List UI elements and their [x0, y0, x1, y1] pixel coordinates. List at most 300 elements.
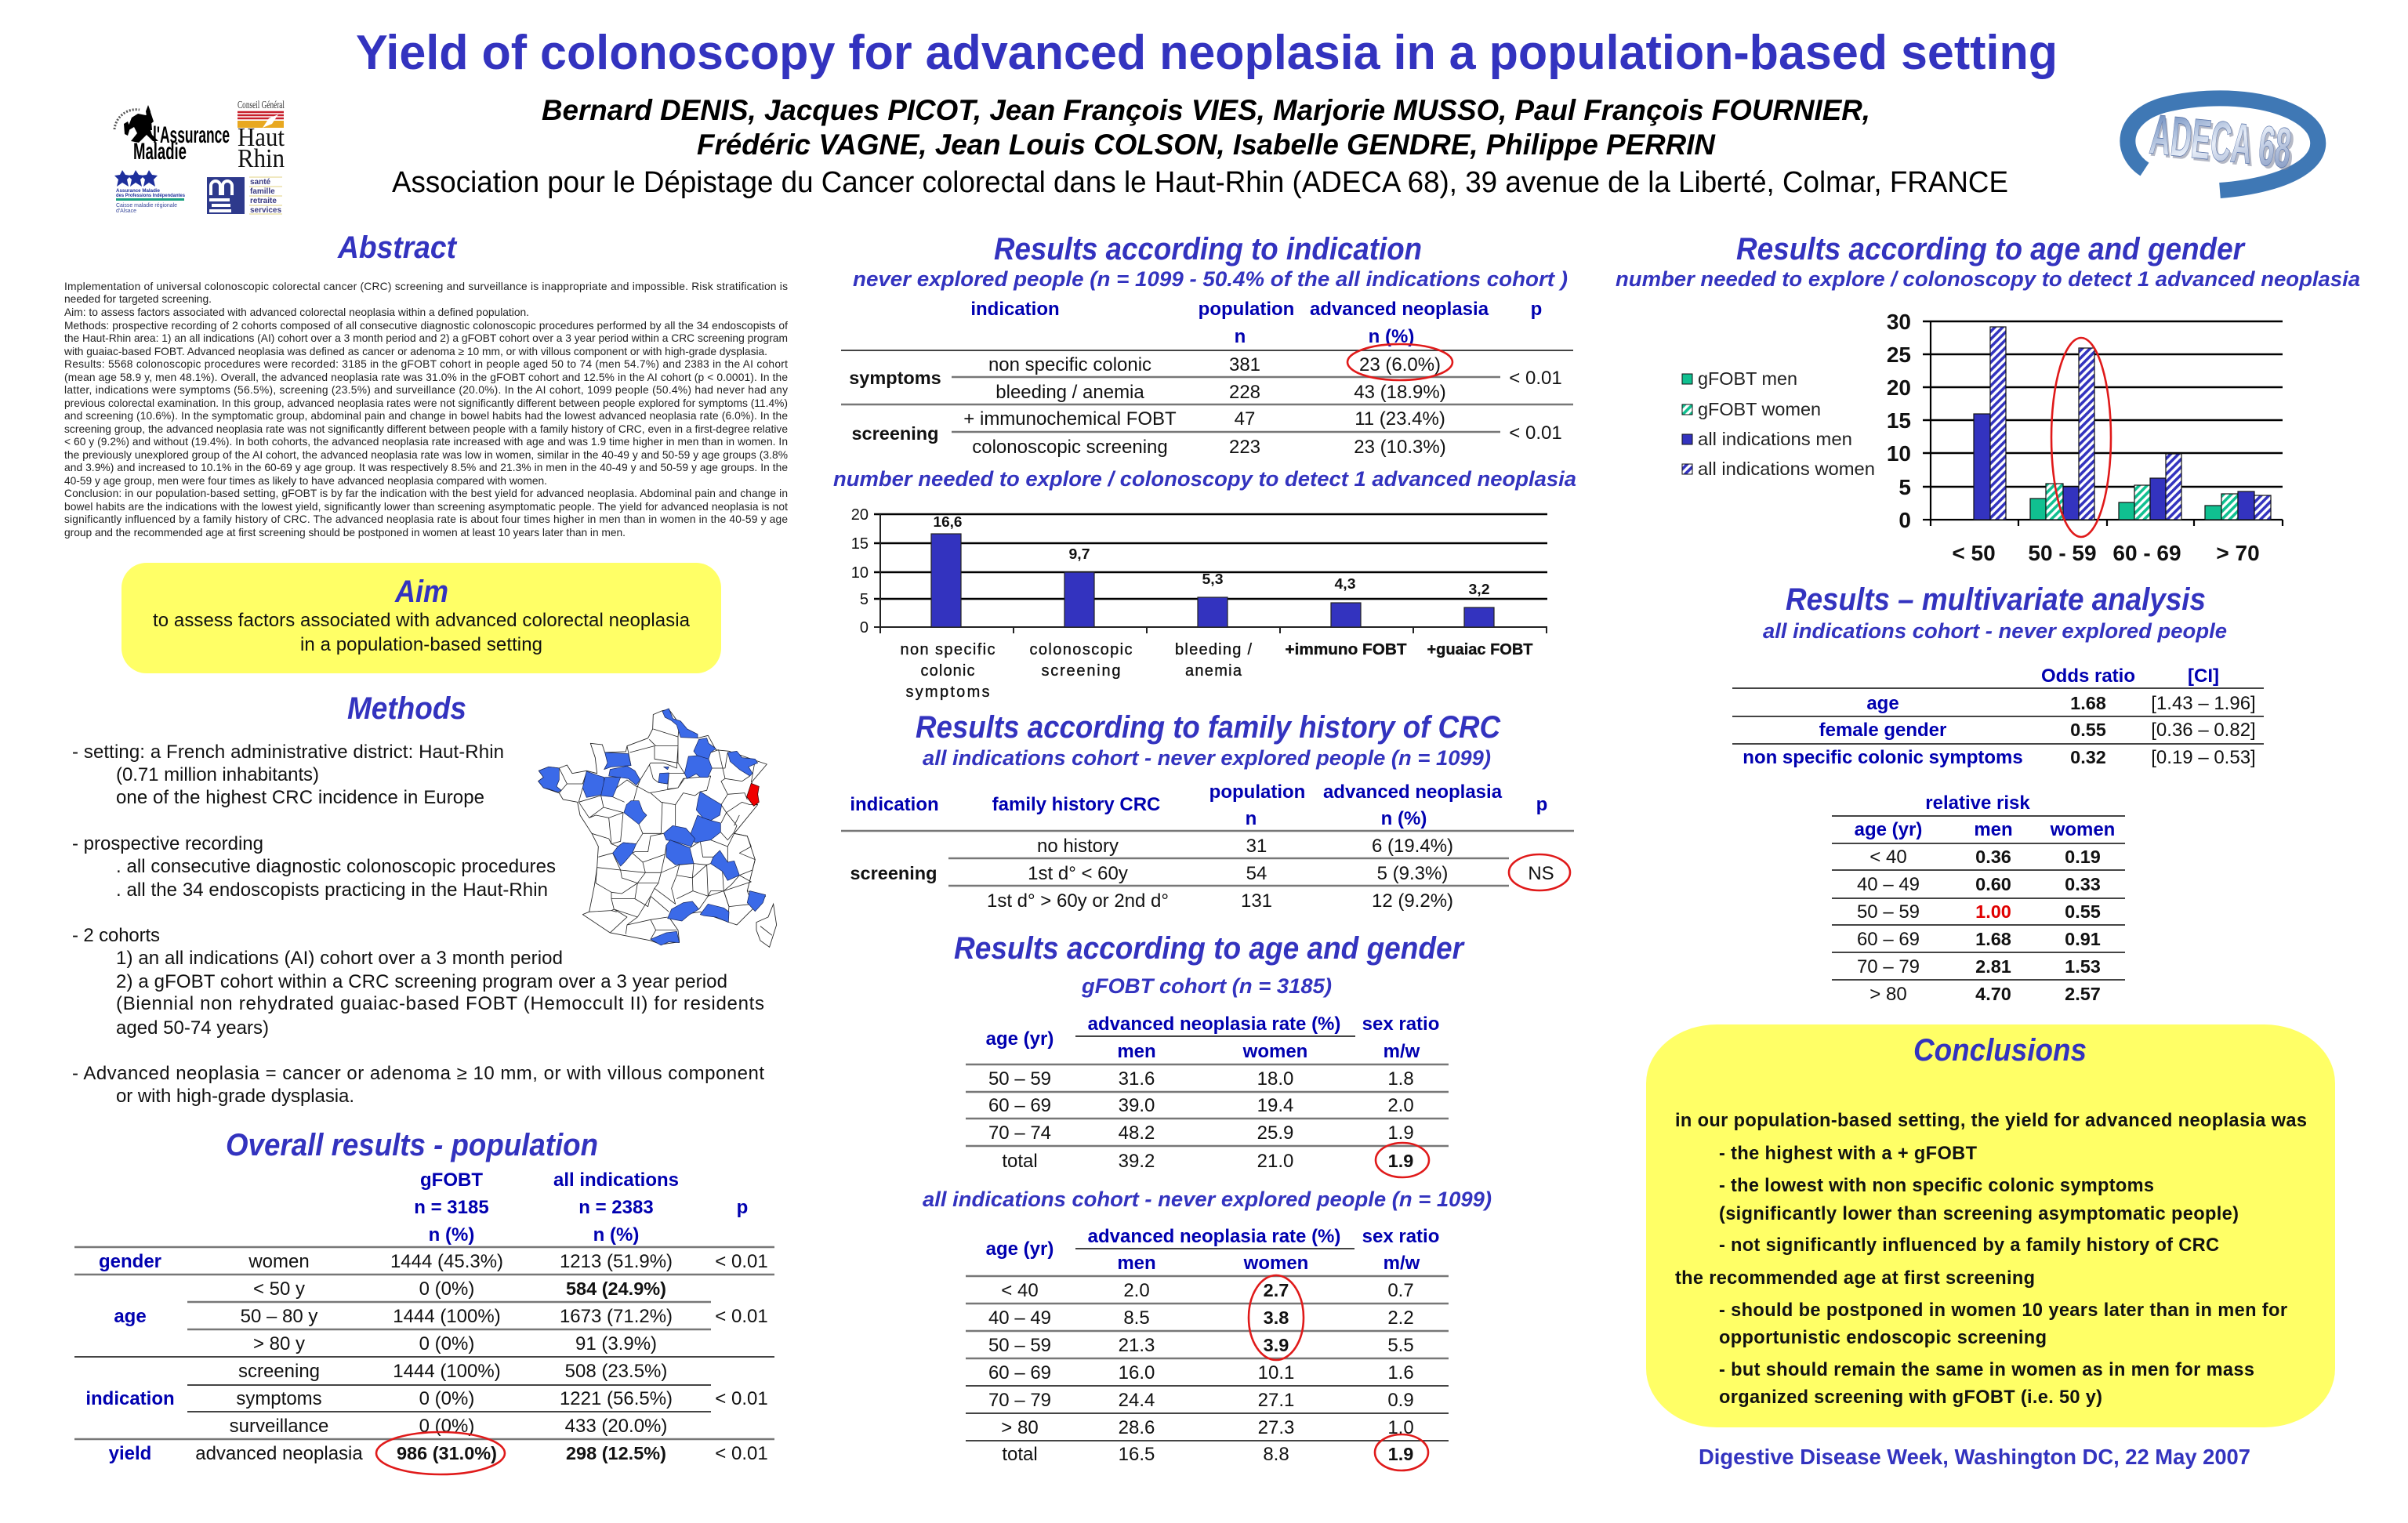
- table: overall results: < 0.01: [715, 1443, 768, 1464]
- bars: [931, 534, 1494, 627]
- table: relative risk: women: [2050, 819, 2115, 840]
- text: conclusions list: - but should remain the same in women as in men for mass: [1719, 1360, 2254, 1380]
- heading: Results according to age and gender (right): Results according to age and gender: [1736, 232, 2246, 267]
- table: all indications cohort by age: < 40: [1001, 1280, 1039, 1301]
- table: overall results: 0 (0%): [419, 1416, 474, 1437]
- value labels: 9,7: [1069, 546, 1090, 562]
- logo: Conseil General Haut-Rhin: Rhin: [238, 144, 285, 173]
- table: relative risk: age (yr): [1855, 819, 1922, 840]
- table: odds ratios: [0.36 – 0.82]: [2151, 720, 2256, 741]
- text block: abstract: screening group, the advanced neoplasia rate was not significantly different between people with a family history of CRC, even in a first-degree relative: [64, 423, 788, 435]
- text block: abstract: significantly influenced by a family history of CRC. The advanced neoplasia rate is about four times higher in men than in women in the 40-59 y age: [64, 513, 788, 525]
- value labels: 4,3: [1334, 576, 1356, 592]
- table: overall results: 1444 (100%): [393, 1306, 501, 1327]
- table: relative risk: relative risk: [1925, 792, 2030, 814]
- table: relative risk: 0.60: [1975, 874, 2011, 894]
- heading: Conclusions: Conclusions: [1913, 1033, 2087, 1068]
- text block: methods: . all the 34 endoscopists practicing in the Haut-Rhin: [116, 879, 548, 901]
- table: results by indication: population: [1199, 299, 1294, 320]
- x axis labels: > 70: [2216, 541, 2260, 565]
- table: gFOBT cohort by age: 1.9: [1387, 1122, 1414, 1144]
- text block: methods: one of the highest CRC incidence in Europe: [116, 787, 484, 808]
- table: odds ratios: female gender: [1819, 720, 1946, 741]
- y axis labels: 20: [1887, 375, 1911, 400]
- table: family history: 1st d° < 60y: [1028, 863, 1128, 884]
- table: overall results: age: [114, 1306, 147, 1327]
- table: family history: no history: [1037, 836, 1119, 857]
- table: all indications cohort by age: 3.9: [1264, 1335, 1289, 1355]
- table: overall results: advanced neoplasia: [195, 1443, 363, 1464]
- x axis labels: < 50: [1952, 541, 1996, 565]
- table: relative risk: 0.33: [2065, 874, 2101, 894]
- table: overall results: 1673 (71.2%): [560, 1306, 673, 1327]
- table: gFOBT cohort by age: 21.0: [1257, 1151, 1293, 1172]
- logo: Assurance Maladie: l'Assurance: [153, 122, 230, 148]
- logo: Assurance Maladie: [114, 105, 230, 165]
- table: overall results: p: [737, 1197, 748, 1218]
- table: results by indication: n (%): [1369, 326, 1414, 347]
- table: results by indication: indication: [970, 299, 1060, 320]
- table: all indications cohort by age: 28.6: [1119, 1417, 1155, 1438]
- table: overall results: n (%): [429, 1224, 474, 1246]
- table: gFOBT cohort by age: 60 – 69: [988, 1095, 1051, 1116]
- table: all indications cohort by age: 0.9: [1387, 1390, 1414, 1411]
- text block: methods: or with high-grade dysplasia.: [116, 1086, 354, 1107]
- table: odds ratios: age: [1866, 693, 1899, 714]
- table: gFOBT cohort by age: sex ratio: [1362, 1014, 1439, 1035]
- table: gFOBT cohort by age: 19.4: [1257, 1095, 1293, 1116]
- y axis labels: [1887, 310, 1911, 532]
- text block: abstract: Methods: prospective recording of 2 cohorts composed of all consecutive diagnostic colonoscopic procedures performed by all the 34 endoscopists of: [64, 320, 788, 332]
- category labels: symptoms: [906, 684, 989, 701]
- category labels: [900, 641, 1533, 701]
- table: family history: indication: [850, 794, 939, 815]
- category labels: +guaiac FOBT: [1427, 641, 1533, 658]
- callout: NS circled: [1509, 854, 1570, 890]
- table: all indications cohort by age: age (yr): [986, 1238, 1054, 1260]
- table: all indications cohort by age: men: [1117, 1253, 1156, 1274]
- table: results by indication: 47: [1235, 408, 1255, 430]
- table: overall results: 508 (23.5%): [565, 1361, 667, 1382]
- text block: abstract: Results: 5568 colonoscopic procedures were recorded: 3185 in the gFOBT cohort in people aged 50 to 74 (men 54.7%) and 2383 in the AI cohort: [64, 358, 788, 370]
- text: conclusions list: - should be postponed in women 10 years later than in men for: [1719, 1300, 2287, 1321]
- heading: Methods: Methods: [347, 691, 466, 726]
- table: all indications cohort by age: 70 – 79: [988, 1390, 1051, 1411]
- text block: abstract: needed for targeted screening.: [64, 293, 212, 305]
- table: family history: 31: [1246, 836, 1267, 857]
- subheading: never explored people: never explored people (n = 1099 - 50.4% of the all indications cohort ): [853, 267, 1568, 291]
- bars: under 50: [1974, 327, 2006, 520]
- table: results by indication: advanced neoplasia: [1310, 299, 1489, 320]
- y axis labels: 10: [851, 564, 869, 582]
- table: all indications cohort by age: 1.0: [1387, 1417, 1414, 1438]
- table: all indications cohort by age: women: [1243, 1253, 1308, 1274]
- table: odds ratios: [1.43 – 1.96]: [2151, 693, 2256, 714]
- value labels: 16,6: [933, 514, 963, 530]
- bars: 60-69: [2119, 454, 2181, 520]
- table: results by indication: 11 (23.4%): [1354, 408, 1445, 430]
- legend: gFOBT women: [1698, 399, 1821, 419]
- heading: Results according to indication: Results according to indication: [994, 232, 1422, 267]
- text block: methods: 1) an all indications (AI) cohort over a 3 month period: [116, 948, 563, 969]
- text: conclusions list: in our population-based setting, the yield for advanced neoplasia was: [1675, 1111, 2307, 1131]
- table: overall results: 1444 (45.3%): [390, 1251, 503, 1272]
- table: all indications cohort by age: 2.7: [1264, 1280, 1289, 1300]
- x axis labels: [1952, 541, 2260, 565]
- table: gFOBT cohort by age: 31.6: [1119, 1068, 1155, 1090]
- table: overall results: surveillance: [230, 1416, 328, 1437]
- table: odds ratios: 0.32: [2070, 747, 2106, 767]
- text block: methods: - Advanced neoplasia = cancer or adenoma ≥ 10 mm, or with villous component: [72, 1063, 764, 1084]
- text: conclusions list: - the highest with a + gFOBT: [1719, 1144, 1978, 1164]
- table: gFOBT cohort by age: 39.0: [1119, 1095, 1155, 1116]
- table: family history: p: [1536, 794, 1547, 815]
- heading: multivariate analysis: Results – multivariate analysis: [1786, 582, 2206, 617]
- table: gFOBT cohort by age: advanced neoplasia rate (%): [1088, 1014, 1340, 1035]
- table: overall results: gender: [99, 1251, 161, 1272]
- text block: abstract: and 3.9%) and increased to 10.1% in the 60-69 y age group. It was respectively 8.5% and 21.3% in men in the 40-49 y and 50-59 y age groups. In the: [64, 462, 788, 473]
- text block: abstract: Conclusion: in our population-based setting, gFOBT is by far the indication with the best yield for advanced neoplasia. Abdominal pain and change in: [64, 488, 788, 499]
- table: all indications cohort by age: 27.1: [1258, 1390, 1294, 1411]
- table: family history: [841, 781, 1574, 912]
- table: relative risk: > 80: [1869, 984, 1907, 1005]
- table: odds ratios: 1.68: [2070, 693, 2106, 713]
- table: relative risk: 2.57: [2065, 984, 2101, 1004]
- y axis labels: 15: [1887, 408, 1911, 433]
- subheading: multivariate cohort: all indications cohort - never explored people: [1763, 619, 2227, 643]
- table: overall results: < 50 y: [253, 1278, 305, 1300]
- highlighted departments: [539, 709, 766, 945]
- table: results by indication: screening: [851, 423, 939, 444]
- table: overall results: 986 (31.0%): [397, 1443, 497, 1463]
- value labels: 5,3: [1202, 571, 1223, 587]
- table: overall results: 91 (3.9%): [575, 1333, 657, 1354]
- authors: Bernard DENIS, Jacques PICOT, Jean François VIES, Marjorie MUSSO, Paul François FOURNIER,: [542, 94, 1870, 126]
- subheading: number needed to explore: number needed to explore / colonoscopy to detect 1 advanced neoplasia: [833, 467, 1576, 491]
- table: all indications cohort by age: advanced neoplasia rate (%): [1088, 1226, 1340, 1247]
- x axis labels: 50 - 59: [2028, 541, 2097, 565]
- category labels: bleeding /: [1175, 641, 1252, 658]
- table: relative risk: 4.70: [1975, 984, 2011, 1004]
- table: family history: 1st d° > 60y or 2nd d°: [987, 890, 1169, 912]
- table: overall results: n = 3185: [414, 1197, 489, 1218]
- table: relative risk: 0.19: [2065, 847, 2101, 867]
- table: overall results: symptoms: [236, 1388, 322, 1409]
- department borders: [559, 723, 758, 939]
- y axis labels: 5: [1898, 475, 1911, 499]
- table: overall results: 584 (24.9%): [566, 1278, 666, 1299]
- text: conclusions list: - the lowest with non specific colonic symptoms: [1719, 1176, 2154, 1196]
- subheading: family history cohort: all indications cohort - never explored people (n = 1099): [923, 746, 1491, 770]
- table: all indications cohort by age: 0.7: [1387, 1280, 1414, 1301]
- text: aim statement: [153, 610, 691, 655]
- category labels: colonoscopic: [1030, 641, 1132, 658]
- table: results by indication: + immunochemical FOBT: [963, 408, 1177, 430]
- table: overall results: 1221 (56.5%): [560, 1388, 673, 1409]
- table: results by indication: non specific colonic: [988, 354, 1151, 375]
- title: Yield of colonoscopy for advanced neoplasia in a population-based setting: [356, 26, 2058, 80]
- logo: MSA: [207, 177, 282, 215]
- table: family history: 131: [1241, 890, 1272, 912]
- table: all indications cohort by age: 60 – 69: [988, 1362, 1051, 1383]
- logo: AMPI Alsace: Caisse maladie régionale: [116, 203, 177, 209]
- y axis labels: 10: [1887, 441, 1911, 466]
- table: results by indication: n: [1235, 326, 1246, 347]
- logo: AMPI Alsace: Assurance Maladie: [116, 189, 161, 194]
- text: conclusions list: the recommended age at first screening: [1675, 1268, 2035, 1289]
- y axis labels: 5: [860, 591, 869, 608]
- heading: Overall results: Overall results - population: [226, 1128, 598, 1162]
- callout: 986 circled: [376, 1432, 505, 1474]
- text block: abstract: previous colorectal examination. In this group, advanced neoplasia rates were not significantly different between people explored for symptoms (11.4%): [64, 397, 788, 409]
- text block: methods: . all consecutive diagnostic colonoscopic procedures: [116, 856, 556, 877]
- category labels: anemia: [1185, 662, 1242, 680]
- table: relative risk: 0.36: [1975, 847, 2011, 867]
- text block: abstract: the previously unexplored group of the AI cohort, the advanced neoplasia rate was low in women, similar in the 40-49 y and 50-59 y age groups (3.8%: [64, 449, 788, 461]
- text block: abstract: Implementation of universal colonoscopic colorectal cancer (CRC) screening and surveillance is inappropriate and impossible. Risk stratification is: [64, 281, 788, 292]
- table: relative risk: 0.91: [2065, 929, 2101, 949]
- table: results by indication: bleeding / anemia: [995, 382, 1144, 403]
- panel: aim: [121, 563, 721, 673]
- table: relative risk: 2.81: [1975, 956, 2011, 977]
- table: gFOBT cohort by age: 1.8: [1387, 1068, 1414, 1090]
- text: aim statement: to assess factors associated with advanced colorectal neoplasia: [153, 610, 691, 631]
- table: overall results: 0 (0%): [419, 1333, 474, 1354]
- table: all indications cohort by age: [966, 1226, 1449, 1465]
- table: overall results: gFOBT: [420, 1169, 483, 1191]
- subheading: number needed by age: number needed to explore / colonoscopy to detect 1 advanced neoplasia: [1616, 267, 2360, 291]
- category labels: colonic: [920, 662, 975, 680]
- table: gFOBT cohort by age: women: [1242, 1041, 1307, 1062]
- table: family history: n: [1246, 808, 1257, 829]
- text block: abstract: latter, indications were symptoms (56.5%), screening (23.5%) and surveillance (20.0%). In the AI cohort, 1099 people (50.4%) had never had any: [64, 384, 788, 396]
- table: relative risk: men: [1974, 819, 2013, 840]
- text block: methods: - setting: a French administrative district: Haut-Rhin: [72, 742, 504, 763]
- table: overall results: [74, 1169, 774, 1464]
- text block: methods: 2) a gFOBT cohort within a CRC screening program over a 3 year period: [116, 971, 727, 992]
- table: all indications cohort by age: 16.0: [1119, 1362, 1155, 1383]
- table: overall results: 50 – 80 y: [241, 1306, 317, 1327]
- legend: [1682, 368, 1875, 479]
- table: results by indication: p: [1531, 299, 1542, 320]
- table: results by indication: < 0.01: [1509, 422, 1562, 444]
- table: overall results: n (%): [593, 1224, 639, 1246]
- table: all indications cohort by age: 10.1: [1258, 1362, 1294, 1383]
- text block: methods: (0.71 million inhabitants): [116, 764, 319, 785]
- y axis labels: 15: [851, 535, 869, 553]
- table: all indications cohort by age: 8.8: [1263, 1444, 1289, 1465]
- text block: methods: - prospective recording: [72, 833, 263, 854]
- footer: meeting: Digestive Disease Week, Washington DC, 22 May 2007: [1699, 1445, 2250, 1469]
- text block: methods: (Biennial non rehydrated guaiac-based FOBT (Hemoccult II) for residents: [116, 993, 764, 1014]
- text: aim statement: in a population-based setting: [300, 634, 542, 655]
- table: all indications cohort by age: 2.0: [1123, 1280, 1150, 1301]
- logo: MSA: services: [250, 206, 281, 215]
- table: all indications cohort by age: 50 – 59: [988, 1335, 1051, 1356]
- table: overall results: yield: [109, 1443, 151, 1464]
- callout: women 40-59 circled: [1249, 1275, 1304, 1360]
- legend: all indications women: [1698, 459, 1875, 479]
- table: family history: 12 (9.2%): [1372, 890, 1453, 912]
- subheading: all indications cohort: all indications cohort - never explored people (n = 1099): [923, 1188, 1492, 1211]
- text block: methods: - 2 cohorts: [72, 925, 160, 946]
- text block: abstract: with guaiac-based FOBT. Advanced neoplasia was defined as cancer or adenoma ≥ 10 mm, or with villous component or with high-grade dysplasia.: [63, 346, 767, 357]
- table: gFOBT cohort by age: 2.0: [1387, 1095, 1414, 1116]
- y axis labels: [851, 506, 869, 636]
- table: gFOBT cohort by age: [966, 1014, 1449, 1172]
- logo: AMPI Alsace: des Professions Indépendantes: [116, 194, 186, 198]
- table: relative risk: 1.68: [1975, 929, 2011, 949]
- heading: Aim: Aim: [394, 575, 448, 609]
- table: results by indication: 223: [1229, 437, 1260, 458]
- callout: all indications sex ratio circled: [1375, 1434, 1428, 1470]
- table: family history: population: [1209, 781, 1305, 803]
- table: family history: screening: [850, 863, 937, 883]
- category labels: +immuno FOBT: [1286, 641, 1406, 658]
- logos: partner institutions: [114, 100, 285, 215]
- table: all indications cohort by age: total: [1002, 1444, 1038, 1465]
- table: all indications cohort by age: 16.5: [1119, 1444, 1155, 1465]
- heading: Results according to age and gender (center): Results according to age and gender: [954, 931, 1465, 966]
- logo: MSA: santé: [250, 178, 271, 187]
- map: France departments: [539, 709, 777, 947]
- table: all indications cohort by age: 8.5: [1123, 1307, 1150, 1329]
- logo: AMPI Alsace: [114, 170, 186, 214]
- text block: abstract: (mean age 58.9 y, men 48.1%). Overall, the advanced neoplasia rate was 31.0% in the gFOBT cohort and 12.5% in the AI cohort (p < 0.0001). In the: [64, 372, 788, 383]
- bar chart: number needed to explore by indication: [851, 506, 1547, 701]
- table: overall results: 298 (12.5%): [566, 1443, 666, 1463]
- table: relative risk: [1832, 792, 2125, 1005]
- heading: Results according to family history: Results according to family history of CRC: [916, 710, 1501, 745]
- table: odds ratios: 0.55: [2070, 720, 2106, 740]
- y axis labels: 30: [1887, 310, 1911, 334]
- callout: 50-59 group circled: [2051, 338, 2111, 537]
- table: odds ratios: Odds ratio: [2041, 665, 2135, 687]
- table: overall results: all indications: [553, 1169, 679, 1191]
- legend: all indications men: [1698, 429, 1852, 449]
- table: all indications cohort by age: 24.4: [1119, 1390, 1155, 1411]
- table: overall results: screening: [238, 1361, 320, 1382]
- value labels: 3,2: [1469, 582, 1489, 597]
- authors: [542, 94, 1870, 161]
- table: all indications cohort by age: 2.2: [1387, 1307, 1414, 1329]
- category labels: screening: [1041, 662, 1121, 680]
- text: conclusions list: (significantly lower than screening asymptomatic people): [1719, 1204, 2239, 1224]
- table: results by indication: [841, 299, 1573, 458]
- logo: MSA: retraite: [250, 197, 277, 205]
- table: gFOBT cohort by age: age (yr): [986, 1028, 1054, 1050]
- y axis labels: 0: [860, 619, 869, 636]
- text block: abstract: the Haut-Rhin area: 1) an all indications (AI) cohort over a 3 month period and 2) a gFOBT cohort over a 3 year period within a CRC screening program: [64, 332, 788, 344]
- table: results by indication: symptoms: [849, 368, 941, 388]
- table: odds ratios: [CI]: [2188, 665, 2219, 687]
- callout: gFOBT sex ratio circled: [1376, 1143, 1429, 1177]
- table: all indications cohort by age: 27.3: [1258, 1417, 1294, 1438]
- table: gFOBT cohort by age: m/w: [1384, 1041, 1420, 1062]
- legend: gFOBT men: [1698, 368, 1797, 389]
- table: gFOBT cohort by age: 1.9: [1388, 1151, 1413, 1171]
- logo: AMPI Alsace: d'Alsace: [116, 209, 136, 214]
- table: relative risk: 70 – 79: [1857, 956, 1920, 977]
- table: family history: NS: [1528, 863, 1554, 884]
- table: gFOBT cohort by age: 50 – 59: [988, 1068, 1051, 1090]
- y axis labels: 25: [1887, 343, 1911, 367]
- table: results by indication: 23 (6.0%): [1359, 354, 1441, 375]
- table: overall results: 0 (0%): [419, 1278, 474, 1300]
- affiliation: Association pour le Dépistage du Cancer colorectal dans le Haut-Rhin (ADECA 68), 39 avenue de la Liberté, Colmar, FRANCE: [392, 166, 2008, 199]
- table: odds ratios: [1732, 665, 2264, 768]
- y axis labels: 20: [851, 506, 869, 524]
- table: all indications cohort by age: 5.5: [1387, 1335, 1414, 1356]
- subheading: gFOBT cohort: gFOBT cohort (n = 3185): [1081, 974, 1332, 998]
- table: odds ratios: [0.19 – 0.53]: [2151, 747, 2256, 768]
- bars: over 70: [2205, 491, 2271, 520]
- table: results by indication: 23 (10.3%): [1354, 437, 1446, 458]
- table: family history: advanced neoplasia: [1323, 781, 1503, 803]
- table: all indications cohort by age: 1.6: [1387, 1362, 1414, 1383]
- bars: 50-59: [2030, 348, 2094, 520]
- logo: ADECA 68: [2127, 98, 2318, 190]
- logo: Conseil General Haut-Rhin: Haut: [238, 123, 285, 152]
- table: overall results: 1213 (51.9%): [560, 1251, 673, 1272]
- x axis labels: 60 - 69: [2112, 541, 2181, 565]
- table: all indications cohort by age: 40 – 49: [988, 1307, 1051, 1329]
- table: results by indication: colonoscopic screening: [972, 437, 1168, 458]
- text: conclusions list: [1675, 1111, 2307, 1408]
- table: odds ratios: non specific colonic symptoms: [1743, 747, 2023, 768]
- table: all indications cohort by age: 1.9: [1388, 1444, 1413, 1464]
- value labels: [933, 514, 1489, 597]
- table: overall results: 433 (20.0%): [565, 1416, 667, 1437]
- authors: Frédéric VAGNE, Jean Louis COLSON, Isabelle GENDRE, Philippe PERRIN: [697, 129, 1716, 161]
- table: family history: n (%): [1381, 808, 1427, 829]
- table: family history: 5 (9.3%): [1377, 863, 1448, 884]
- table: overall results: 1444 (100%): [393, 1361, 501, 1382]
- table: all indications cohort by age: 21.3: [1119, 1335, 1155, 1356]
- table: relative risk: 1.53: [2065, 956, 2101, 977]
- text: conclusions list: - not significantly influenced by a family history of CRC: [1719, 1235, 2219, 1256]
- table: overall results: n = 2383: [578, 1197, 654, 1218]
- table: overall results: < 0.01: [715, 1306, 768, 1327]
- table: relative risk: 1.00: [1975, 901, 2011, 922]
- table: all indications cohort by age: > 80: [1001, 1417, 1039, 1438]
- table: gFOBT cohort by age: 48.2: [1119, 1122, 1155, 1144]
- table: all indications cohort by age: sex ratio: [1362, 1226, 1439, 1247]
- text block: methods: [72, 742, 764, 1107]
- text block: abstract: [63, 281, 788, 538]
- text block: abstract: < 60 y (9.2%) and without (19.4%). In both cohorts, the advanced neoplasia rate increased with age and was 1.9 time higher in men than in women. In: [64, 436, 788, 448]
- text: conclusions list: organized screening with gFOBT (i.e. 50 y): [1719, 1387, 2102, 1408]
- text block: abstract: group and the recommended age at first screening should be postponed in women at least 10 years later than in men.: [64, 527, 626, 538]
- heading: Abstract: Abstract: [337, 230, 458, 265]
- table: relative risk: 0.55: [2065, 901, 2101, 922]
- table: overall results: women: [248, 1251, 310, 1272]
- text block: abstract: bowel habits are the indications with the lowest yield, significantly lower than screening asymptomatic people. The yield for advanced neoplasia is not: [64, 501, 788, 513]
- table: all indications cohort by age: 3.8: [1264, 1307, 1289, 1328]
- bar chart: number needed by age and gender: [1887, 310, 2283, 565]
- text block: methods: aged 50-74 years): [116, 1017, 269, 1039]
- panel: conclusions: [1646, 1024, 2335, 1427]
- table: results by indication: 381: [1229, 354, 1260, 375]
- text: conclusions list: opportunistic endoscopic screening: [1719, 1328, 2047, 1348]
- table: gFOBT cohort by age: 18.0: [1257, 1068, 1293, 1090]
- logo: Conseil General Haut-Rhin: [238, 100, 285, 173]
- table: family history: family history CRC: [992, 794, 1160, 815]
- table: family history: 54: [1246, 863, 1267, 884]
- logo: Conseil General Haut-Rhin: Conseil Général: [238, 100, 285, 111]
- table: gFOBT cohort by age: men: [1117, 1041, 1156, 1062]
- table: relative risk: 50 – 59: [1857, 901, 1920, 923]
